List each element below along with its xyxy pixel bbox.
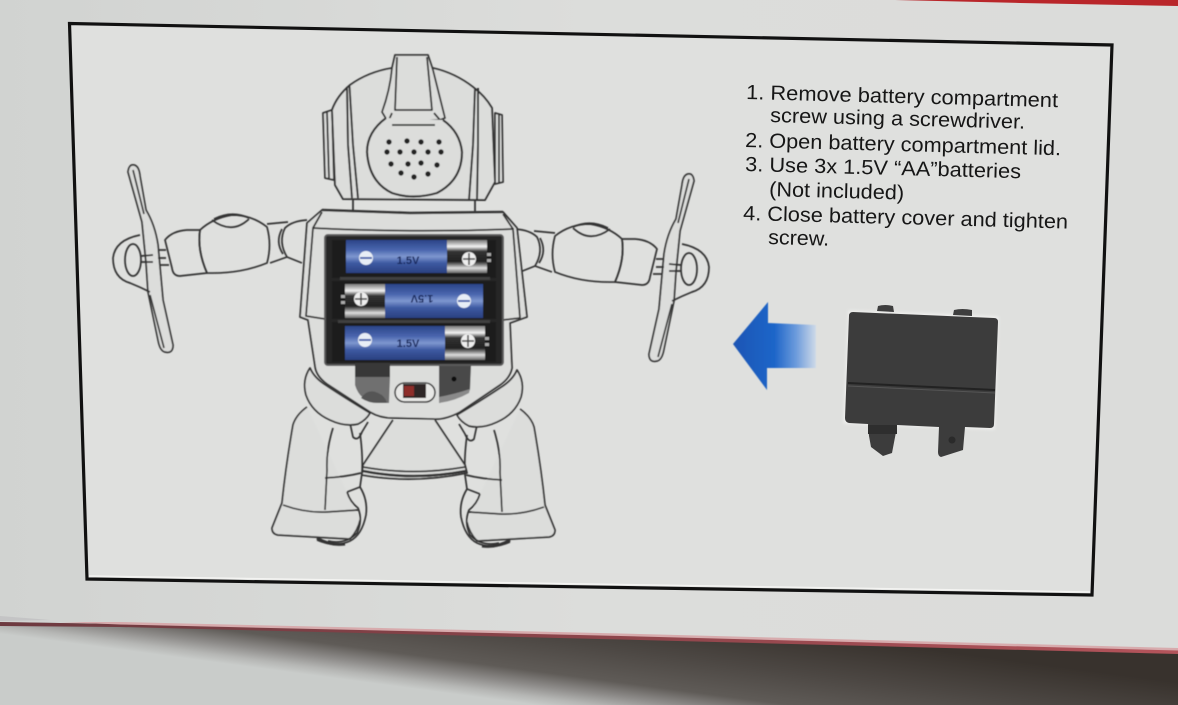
battery 2 bbox=[341, 284, 483, 318]
head bbox=[323, 55, 503, 211]
compartment latch left bbox=[355, 363, 390, 403]
red top edge of box bbox=[895, 0, 1178, 6]
power switch bbox=[395, 383, 435, 402]
battery 1: 1.5V bbox=[397, 255, 420, 267]
right ear bbox=[495, 113, 503, 184]
instructions text: screw using a screwdriver. bbox=[770, 104, 1025, 134]
instructions text: screw. bbox=[768, 226, 829, 251]
robot illustration bbox=[113, 55, 709, 546]
dome bbox=[332, 68, 495, 200]
battery 3: 1.5V bbox=[397, 338, 420, 350]
battery 1 bbox=[346, 240, 491, 273]
head top visor bbox=[382, 55, 445, 122]
legs bbox=[272, 368, 370, 544]
battery compartment bbox=[325, 235, 503, 365]
neck bbox=[353, 199, 475, 211]
surface below box with shadow bbox=[0, 616, 1178, 705]
battery 2: 1.5V bbox=[410, 292, 433, 304]
panel: instruction frame bbox=[70, 24, 1112, 595]
instructions text: (Not included) bbox=[769, 178, 904, 205]
battery 3 bbox=[345, 326, 489, 360]
instructions text: 2. Open battery compartment lid. bbox=[745, 129, 1061, 160]
instructions text bbox=[743, 81, 1068, 251]
speaker face bbox=[367, 118, 462, 196]
instructions text: 4. Close battery cover and tighten bbox=[743, 202, 1068, 234]
icon: battery cover bbox=[845, 305, 998, 457]
instructions text: 1. Remove battery compartment bbox=[746, 81, 1059, 112]
crotch and pelvis bar bbox=[362, 420, 467, 479]
right arm and propeller bbox=[515, 174, 709, 361]
arrow pointing to robot bbox=[733, 302, 816, 390]
left arm and propeller bbox=[113, 165, 307, 352]
speaker holes bbox=[384, 138, 444, 180]
torso bbox=[300, 210, 527, 479]
instructions text: 3. Use 3x 1.5V “AA”batteries bbox=[745, 153, 1021, 183]
left ear bbox=[323, 110, 334, 180]
compartment latch right with screw bbox=[439, 366, 471, 403]
